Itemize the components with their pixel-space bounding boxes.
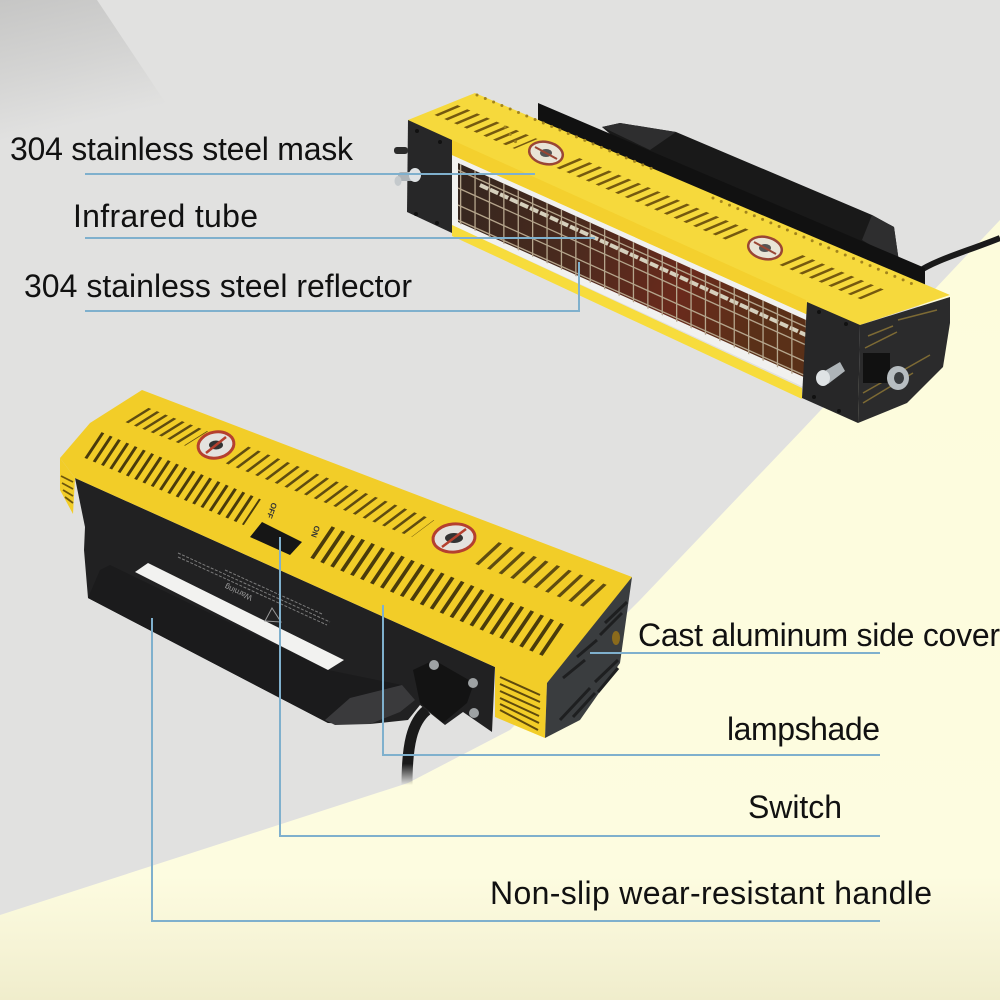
rear plate bbox=[538, 103, 925, 285]
label: Switch: Switch bbox=[748, 789, 842, 825]
right side cover bbox=[858, 297, 950, 423]
handle and plate bbox=[75, 478, 495, 732]
top row slots bbox=[137, 415, 599, 597]
corner panel vents bbox=[500, 677, 540, 730]
left bracket bbox=[394, 120, 452, 233]
lower lamp bbox=[60, 390, 632, 785]
reflector window bbox=[452, 155, 806, 388]
label: 304 stainless steel reflector: 304 stainless steel reflector bbox=[24, 268, 412, 304]
label: Cast aluminum side cover: Cast aluminum side cover bbox=[638, 617, 1000, 653]
handle grip gap bbox=[135, 563, 344, 670]
label: Infrared tube: Infrared tube bbox=[73, 198, 258, 234]
handle tube bbox=[88, 565, 402, 724]
leader lines bbox=[85, 174, 880, 921]
tube highlight bbox=[480, 185, 806, 335]
left end vents bbox=[60, 458, 75, 514]
cable bbox=[407, 710, 427, 785]
warning label lines bbox=[178, 553, 330, 625]
right bracket bbox=[802, 302, 860, 423]
warning badge 1 bbox=[527, 139, 565, 167]
label: Non-slip wear-resistant handle: Non-slip wear-resistant handle bbox=[490, 875, 932, 911]
lower row slots bbox=[93, 445, 560, 643]
rear handle bbox=[602, 123, 905, 285]
corner yellow panel bbox=[495, 667, 547, 738]
warning badge 2 bbox=[746, 234, 784, 262]
upper lamp bbox=[394, 93, 1000, 423]
yellow mask bbox=[408, 93, 950, 325]
infrared tube interior bbox=[458, 163, 806, 378]
warning badge 1 bbox=[196, 429, 236, 461]
power cable bbox=[918, 238, 1000, 272]
rocker switch: ON bbox=[309, 524, 322, 539]
yellow housing bbox=[60, 390, 632, 692]
side cover bbox=[545, 577, 632, 738]
protective mesh bbox=[458, 170, 806, 376]
warning text: Warning bbox=[223, 582, 254, 602]
front fold bbox=[452, 140, 806, 314]
rocker switch: OFF bbox=[265, 501, 279, 520]
label: 304 stainless steel mask: 304 stainless steel mask bbox=[10, 131, 354, 167]
label: lampshade: lampshade bbox=[727, 711, 880, 747]
warning badge 2 bbox=[432, 522, 476, 554]
top slots bbox=[446, 110, 877, 296]
power connector bbox=[413, 660, 479, 723]
rocker switch bbox=[250, 501, 322, 555]
lower yellow strip bbox=[452, 225, 802, 399]
vent dots bbox=[477, 95, 915, 285]
warning triangle bbox=[265, 608, 281, 622]
handle end shade bbox=[325, 685, 415, 725]
